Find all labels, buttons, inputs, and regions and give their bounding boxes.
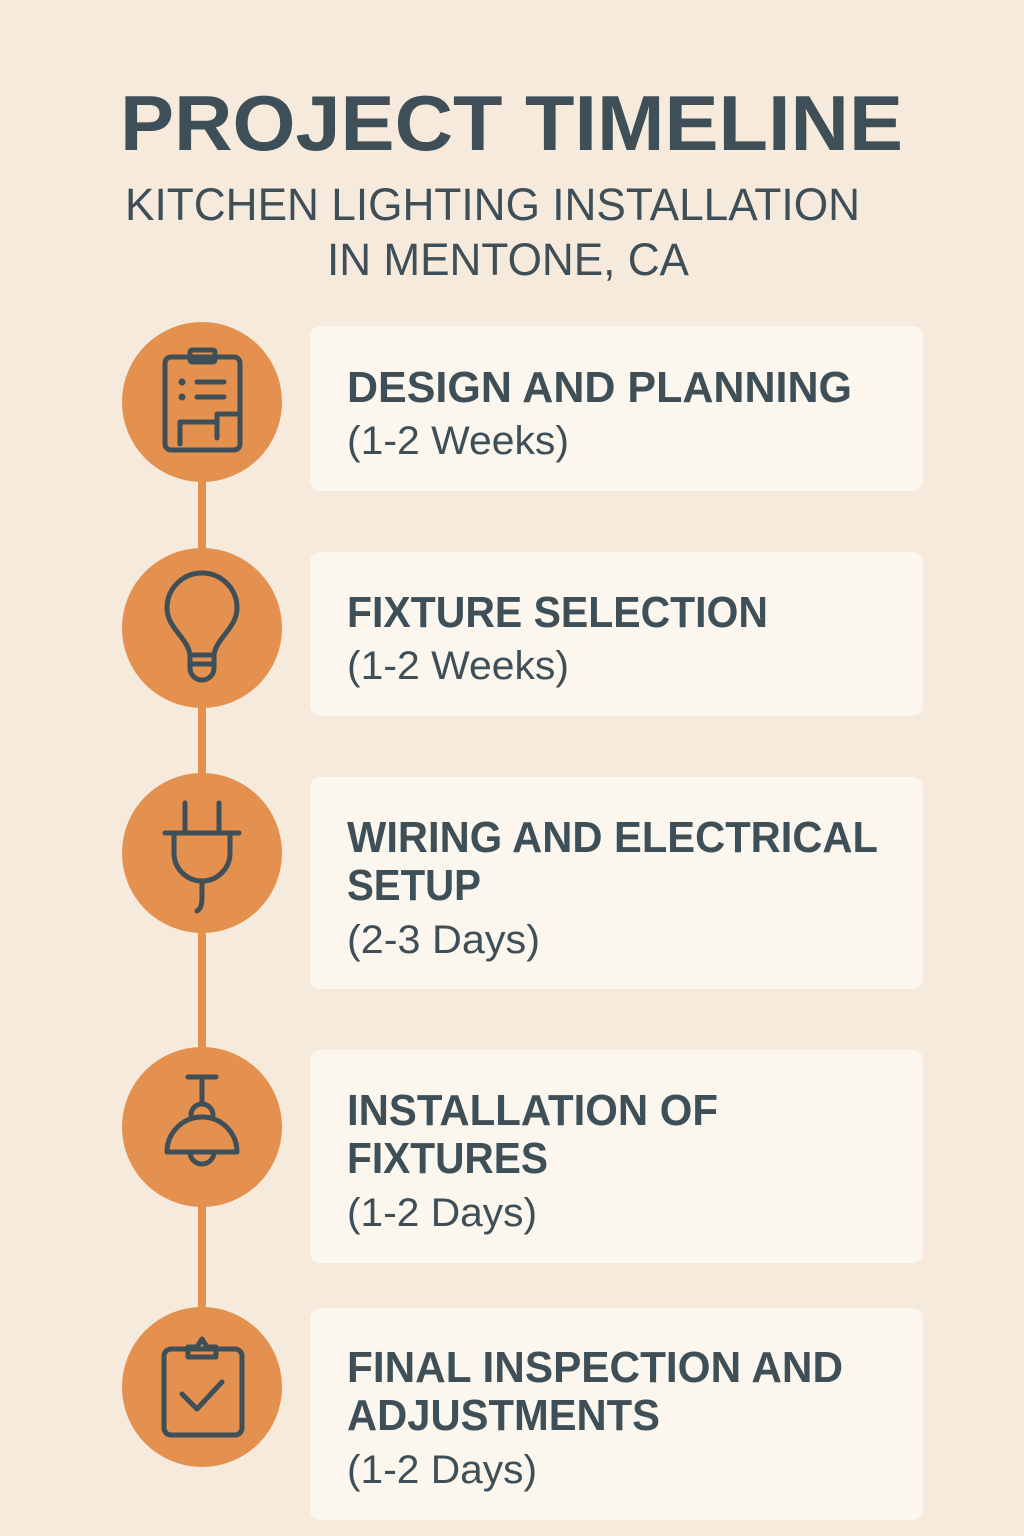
card 1: (1-2 Weeks) [347,419,569,463]
step 4: installation [122,1047,923,1263]
icon: pendant lamp [122,1047,282,1207]
title: PROJECT TIMELINE [120,79,903,167]
step 5: final inspection [122,1307,923,1520]
card 3: (2-3 Days) [347,918,540,962]
step 1: design and planning [122,322,923,491]
card 3: WIRING AND ELECTRICAL [347,813,878,862]
card 4: INSTALLATION OF [347,1086,718,1135]
icon: clipboard plan [122,322,282,482]
card 4: FIXTURES [347,1134,548,1183]
icon: light bulb [122,548,282,708]
icon: clipboard check [122,1307,282,1467]
card 3 [310,777,923,989]
card 2: (1-2 Weeks) [347,644,569,688]
card 3: SETUP [347,861,481,910]
step 2: fixture selection [122,548,923,716]
subtitle: IN MENTONE, CA [327,234,689,285]
icon: plug [122,773,282,933]
subtitle: KITCHEN LIGHTING INSTALLATION [125,179,860,230]
timeline connector line [198,402,206,1387]
card 2: FIXTURE SELECTION [347,588,768,637]
card 2 [310,552,923,716]
card 4: (1-2 Days) [347,1191,537,1235]
card 5: ADJUSTMENTS [347,1391,660,1440]
step 3: wiring [122,773,923,989]
subtitle [125,179,860,285]
card 5: FINAL INSPECTION AND [347,1343,843,1392]
card 1: DESIGN AND PLANNING [347,363,852,412]
card 5: (1-2 Days) [347,1448,537,1492]
card 1 [310,326,923,491]
card 4 [310,1050,923,1263]
card 5 [310,1308,923,1520]
